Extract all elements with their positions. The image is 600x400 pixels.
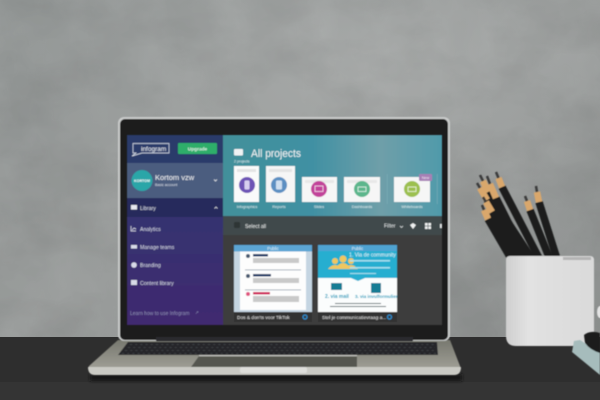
menu items (131, 226, 175, 287)
card: dashboards: Dashboards (352, 205, 372, 209)
card: dashboards (344, 177, 380, 209)
pencils (477, 172, 558, 262)
project card: communicatievraag: Public (352, 246, 363, 251)
help link: Learn how to use Infogram (130, 311, 189, 317)
card: reports (266, 166, 295, 209)
card: infographics: Infographics (237, 205, 257, 209)
laptop (88, 117, 462, 381)
icon: mail (331, 283, 342, 290)
icon: form (371, 283, 381, 293)
project card: communicatievraag (318, 245, 398, 322)
menu items: Analytics (140, 227, 161, 233)
library row: Library (140, 206, 156, 212)
sidebar (127, 135, 223, 325)
project card: dos and donts (234, 245, 312, 322)
project card: communicatievraag: Stel je communicatievraag a... (322, 315, 386, 321)
account panel: KORTOM (134, 179, 150, 183)
header: all projects (223, 135, 442, 216)
card: slides: Slides (314, 205, 324, 209)
card: slides (302, 177, 337, 209)
cup (506, 256, 594, 346)
pencil cup with pencils (477, 172, 594, 346)
icon: people (328, 256, 358, 269)
upgrade button: Upgrade (188, 146, 208, 152)
keyboard (118, 342, 438, 355)
card: whiteboards: Whiteboards (401, 205, 423, 209)
account panel: Kortom vzw (155, 173, 195, 182)
laptop base (88, 340, 461, 375)
project card: dos and donts: Public (267, 246, 279, 251)
laptop shadow (90, 374, 462, 381)
infogram logo (132, 144, 169, 156)
folder icon (234, 149, 243, 156)
header: all projects: 2 projects (234, 160, 250, 164)
card: reports: Reports (272, 205, 286, 209)
project card: dos and donts: Dos & don'ts voor TikTok (237, 315, 290, 321)
infogram logo: infogram (141, 146, 166, 153)
card: whiteboards (394, 174, 432, 209)
desk surface (0, 337, 600, 400)
trackpad (191, 356, 357, 367)
laptop lid (118, 117, 450, 341)
toolbar: Select all (245, 224, 266, 230)
library row (127, 198, 223, 217)
toolbar (223, 216, 442, 235)
menu items: Content library (140, 281, 174, 287)
account panel: Basic account (155, 183, 177, 187)
card: whiteboards: New (422, 176, 430, 180)
screen (127, 135, 442, 325)
header: all projects: All projects (251, 148, 301, 160)
project card: communicatievraag: 2. via mail (325, 294, 350, 300)
upgrade button (178, 143, 217, 154)
sidebar: ↗ (195, 310, 199, 315)
project card: communicatievraag: 3. via invulformulier (355, 294, 398, 299)
project type cards (234, 166, 438, 209)
menu items: Manage teams (140, 245, 175, 251)
card: infographics (234, 166, 259, 209)
menu items: Branding (140, 263, 161, 269)
project card: communicatievraag: 1. Via de community (349, 252, 396, 258)
toolbar: Filter (384, 224, 396, 230)
notebook and black object (572, 306, 600, 375)
account panel (127, 163, 223, 198)
